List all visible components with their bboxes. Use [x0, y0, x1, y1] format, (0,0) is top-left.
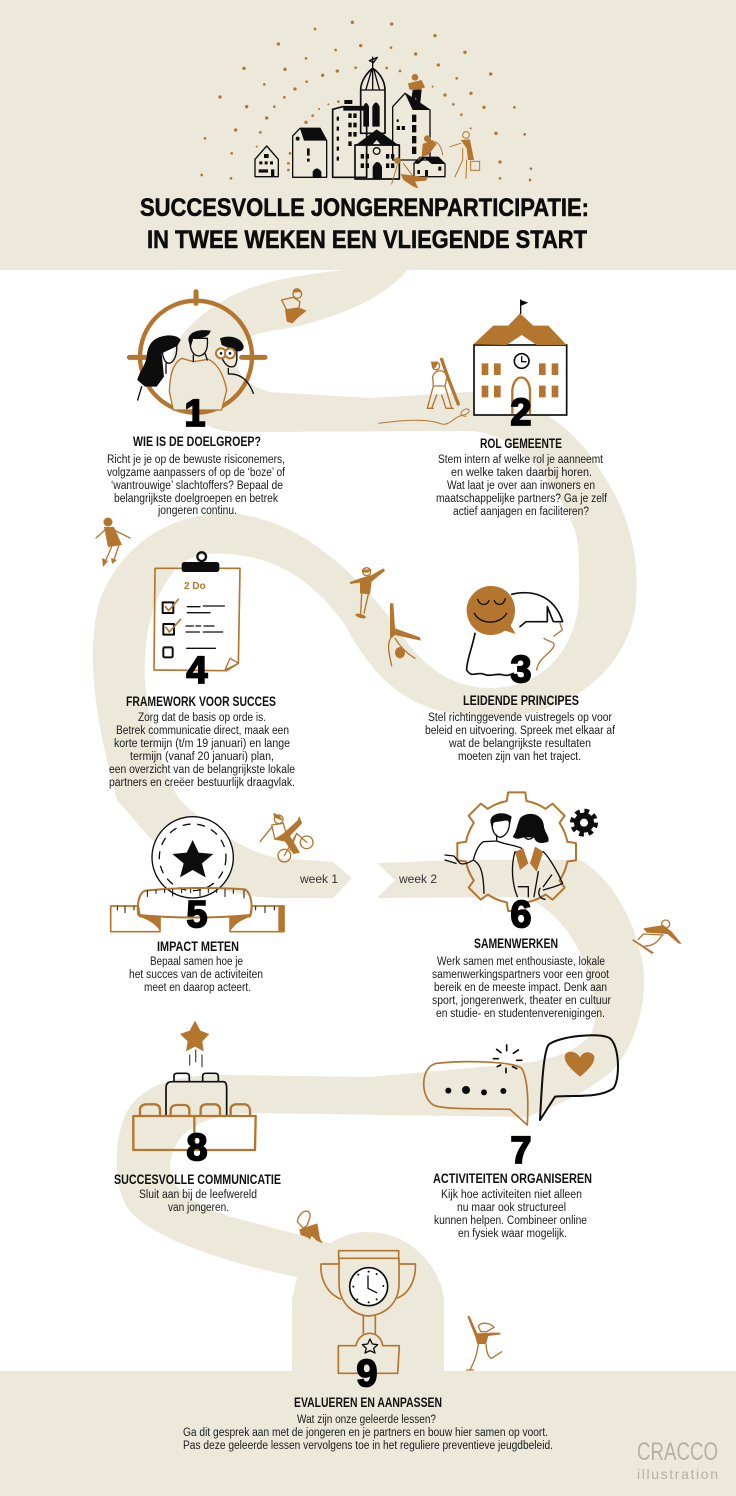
icon: town hall with drawing figure — [378, 300, 567, 424]
icon: coin and measuring tape with cyclist — [111, 813, 313, 932]
text: wie is de doelgroep — [107, 434, 286, 517]
credit: Cracco illustration: illustration — [637, 1466, 718, 1482]
squiggle line — [378, 409, 469, 424]
text: wie is de doelgroep: belangrijkste doelgroepen en betrek — [114, 493, 278, 505]
text: leidende principes: wat de belangrijkste resultaten — [448, 738, 591, 750]
figure with pencil — [427, 359, 458, 408]
icon: gear with two people — [445, 792, 682, 954]
woman — [512, 814, 563, 899]
number 3: 3 — [510, 649, 532, 691]
text: rol gemeente: ROL GEMEENTE — [480, 436, 562, 451]
black bubble with heart — [540, 1035, 618, 1120]
text: succesvolle communicatie: SUCCESVOLLE COMMUNICATIE — [114, 1172, 281, 1187]
text: impact meten — [129, 939, 263, 994]
credit: Cracco illustration — [637, 1438, 718, 1482]
text: impact meten: IMPACT METEN — [157, 939, 239, 954]
text: samenwerken: samenwerkingspartners voor een groot — [432, 969, 610, 981]
tape tails — [111, 906, 284, 932]
text: wie is de doelgroep: jongeren continu. — [157, 505, 237, 517]
text: framework voor succes: partners en creëer bestuurlijk draagvlak. — [109, 777, 295, 789]
title: IN TWEE WEKEN EEN VLIEGENDE START — [147, 226, 587, 254]
brown bottom block — [133, 1104, 256, 1150]
text: framework voor succes: FRAMEWORK VOOR SUCCES — [126, 694, 276, 709]
house with black roof — [293, 128, 327, 177]
text: impact meten: meet en daarop acteert. — [144, 982, 251, 994]
text: leidende principes: moeten zijn van het traject. — [458, 751, 581, 763]
icon: lego blocks and star — [133, 1021, 256, 1150]
clock — [350, 1268, 388, 1306]
text: rol gemeente: actief aanjagen en faciliteren? — [453, 506, 589, 518]
bottom panel — [0, 1371, 736, 1496]
head profile line art — [467, 593, 563, 675]
header panel — [0, 0, 736, 270]
tape band — [117, 888, 274, 917]
number 4: 4 — [186, 650, 208, 692]
small house — [255, 146, 278, 177]
text: rol gemeente — [436, 436, 608, 518]
icon: trophy with clock and figures — [297, 1211, 502, 1373]
tall house — [393, 93, 430, 160]
text: samenwerken: sport, jongerenwerk, theater en cultuur — [432, 995, 611, 1007]
text: samenwerken: en studie- en studentenverenigingen. — [436, 1008, 605, 1020]
tower — [361, 57, 385, 133]
text: succesvolle communicatie: Sluit aan bij de leefwereld — [139, 1189, 257, 1201]
number 2: 2 — [510, 392, 532, 434]
text: leidende principes — [425, 693, 616, 763]
text: rol gemeente: maatschappelijke partners? Ga je zelf — [436, 493, 608, 505]
boy with glasses — [216, 337, 253, 393]
text: evalueren en aanpassen: Pas deze geleerde lessen vervolgens toe in het reguliere preventieve jeugdbeleid. — [183, 1440, 553, 1452]
icon and figures: guiding principles — [350, 568, 563, 675]
text: wie is de doelgroep: volgzame aanpassers of op de ‘boze’ of — [107, 467, 286, 479]
text: framework voor succes: een overzicht van de belangrijkste lokale — [109, 764, 295, 776]
small black gear — [572, 811, 596, 834]
text: framework voor succes: Betrek communicatie direct, maak een — [116, 725, 289, 737]
gear outline — [457, 792, 576, 911]
coin with star — [152, 817, 233, 898]
illustration: starry city — [200, 21, 532, 188]
text: activiteiten organiseren: Kijk hoe activiteiten niet alleen — [441, 1189, 582, 1201]
label: week 2: week 2 — [398, 872, 437, 886]
building — [473, 300, 567, 415]
text: leidende principes: beleid en uitvoering. Spreek met elkaar af — [425, 725, 616, 737]
text: leidende principes: Stel richtinggevende vuistregels op voor — [428, 712, 612, 724]
apartment block — [333, 100, 367, 177]
star — [180, 1021, 209, 1051]
number 6: 6 — [510, 894, 532, 936]
text: evalueren en aanpassen: Ga dit gesprek aan met de jongeren en je partners en bouw hier samen op voort. — [183, 1427, 548, 1439]
text: wie is de doelgroep: Richt je je op de bewuste risiconemers, — [107, 454, 285, 466]
figure: sitting girl — [297, 1211, 323, 1243]
number 8: 8 — [186, 1127, 208, 1169]
black top block — [166, 1073, 227, 1115]
small right house — [414, 157, 445, 177]
label: week 1: week 1 — [299, 872, 338, 886]
winding path band — [93, 270, 644, 1372]
figure: dancing youth — [96, 518, 130, 567]
text: activiteiten organiseren: kunnen helpen. Combineer online — [434, 1215, 587, 1227]
text: evalueren en aanpassen: EVALUEREN EN AANPASSEN — [294, 1395, 442, 1410]
text: rol gemeente: Stem intern af welke rol je aanneemt — [438, 454, 604, 466]
text: framework voor succes: Zorg dat de basis op orde is. — [138, 712, 266, 724]
figure: sitting youth — [282, 288, 307, 323]
title: SUCCESVOLLE JONGERENPARTICIPATIE: — [140, 194, 589, 222]
text: activiteiten organiseren: en fysiek waar mogelijk. — [458, 1228, 567, 1240]
figures on the city — [392, 74, 480, 188]
text: framework voor succes: korte termijn (t/m 19 januari) en lange — [114, 738, 290, 750]
man in the middle — [169, 330, 227, 410]
figure: cyclist — [260, 813, 313, 862]
text: samenwerken: SAMENWERKEN — [474, 936, 558, 951]
motion lines — [190, 1050, 202, 1067]
icon: smiling speech bubble — [467, 586, 516, 635]
figure: skateboarder — [350, 568, 385, 619]
number 7: 7 — [510, 1130, 532, 1172]
woman with long hair — [137, 335, 181, 400]
text: wie is de doelgroep: ‘wantrouwige’ slachtoffers? Bepaal de — [111, 480, 283, 492]
text: samenwerken: Werk samen met enthousiaste, lokale — [437, 956, 605, 968]
icon: target with three youths — [129, 292, 265, 413]
brown bubble — [424, 1062, 528, 1125]
text: evalueren en aanpassen: Wat zijn onze geleerde lessen? — [297, 1414, 436, 1426]
text: activiteiten organiseren: nu maar ook structureel — [457, 1202, 566, 1214]
town hall — [355, 129, 399, 179]
text: framework voor succes: termijn (vanaf 20 januari) plan, — [130, 751, 274, 763]
trophy star — [362, 1339, 378, 1353]
text: succesvolle communicatie: van jongeren. — [168, 1202, 229, 1214]
trophy cup — [321, 1251, 415, 1373]
text: samenwerken: bereik en de meeste impact. Denk aan — [434, 982, 607, 994]
checkbox list — [163, 599, 224, 657]
number 5: 5 — [186, 894, 208, 936]
text: wie is de doelgroep: WIE IS DE DOELGROEP? — [133, 434, 261, 449]
number 9: 9 — [356, 1353, 378, 1395]
figure: handstand — [389, 603, 421, 666]
text: impact meten: het succes van de activiteiten — [129, 969, 263, 981]
figure: running girl — [467, 1316, 502, 1370]
text: framework voor succes — [109, 694, 295, 789]
man — [445, 813, 522, 893]
text: activiteiten organiseren — [433, 1171, 592, 1240]
sparkle rays — [493, 1045, 522, 1073]
text: succesvolle communicatie — [114, 1172, 281, 1214]
icon: speech bubbles — [424, 1035, 618, 1125]
text: samenwerken — [432, 936, 611, 1020]
text: evalueren en aanpassen — [183, 1395, 553, 1452]
text: rol gemeente: en welke taken daarbij horen. — [451, 467, 592, 479]
dots sky — [200, 21, 532, 181]
figure: skater on right — [632, 920, 682, 954]
title — [140, 194, 589, 254]
text: impact meten: Bepaal samen hoe je — [150, 956, 243, 968]
number 1: 1 — [184, 393, 206, 435]
icon: to-do clipboard — [154, 552, 240, 671]
text: rol gemeente: Wat laat je over aan inwoners en — [447, 480, 595, 492]
text: leidende principes: LEIDENDE PRINCIPES — [463, 693, 579, 708]
label 2 Do: 2 Do — [184, 581, 206, 592]
text: activiteiten organiseren: ACTIVITEITEN ORGANISEREN — [433, 1171, 592, 1186]
